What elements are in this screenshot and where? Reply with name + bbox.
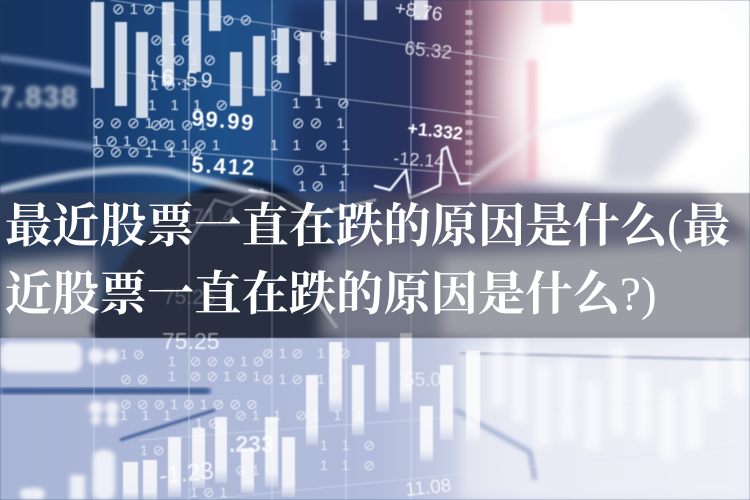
background: hand and pen silhouette	[0, 85, 750, 345]
digit rows lower: 1 1 1	[120, 407, 176, 423]
digit rows lower: ⊘⊘⊘1⊘1⊘⊘⊘	[120, 396, 263, 412]
digit columns upper: ⊘⊘⊘1 1 ⊘	[92, 144, 207, 161]
digit columns upper: ⊘⊘1⊘	[155, 52, 221, 69]
blurred white bars lower right	[491, 338, 746, 460]
market numbers upper	[146, 0, 464, 229]
digit columns upper: ⊘⊘⊘1⊘	[92, 115, 176, 132]
digit rows lower: ⊘1	[235, 462, 265, 478]
digit rows lower: 1 ⊘⊘1⊘1	[168, 368, 265, 384]
market numbers upper: -12.14	[393, 148, 445, 172]
market numbers lower: 75.25	[162, 328, 220, 354]
digit rows lower: ⊘1⊘ 1⊘	[262, 371, 347, 387]
digit columns upper: ⊘⊘ 1	[292, 115, 350, 132]
digit columns upper: 1⊘ 1	[298, 178, 351, 195]
background: light lower half	[0, 338, 750, 500]
digit columns upper: 1 1 1 ⊘	[148, 97, 233, 114]
digit columns upper: ⊘	[270, 77, 288, 94]
digit rows lower: ⊘1⊘ 1 ⊘	[262, 345, 356, 361]
digit rows lower: 1⊘	[120, 346, 150, 362]
digit columns upper: 1⊘1⊘1	[150, 137, 225, 154]
digit columns upper: 1 1 ⊘ 1	[270, 137, 355, 154]
blurred horizontal light streaks	[0, 58, 265, 195]
digit columns upper: 1 1 ⊘	[292, 95, 355, 112]
red accent bars upper right	[527, 0, 572, 180]
digit rows lower: 1 1 ⊘	[320, 437, 380, 453]
market numbers lower: .233	[229, 431, 274, 457]
market numbers upper: 65.32	[403, 38, 453, 64]
market numbers upper: 99.99	[191, 105, 255, 135]
digit columns upper: ⊘⊘	[222, 12, 257, 29]
white candlestick bars upper	[91, 0, 428, 118]
market numbers upper: 5.412	[191, 152, 255, 180]
white bars lower	[123, 333, 480, 500]
digit columns upper: ⊘ 1 1	[292, 162, 355, 179]
digit rows lower: ⊘1 1 ⊘1 1 1	[235, 407, 368, 423]
digit columns upper	[92, 1, 355, 195]
market numbers lower	[158, 286, 452, 500]
digit columns upper: 1⊘1⊘	[92, 133, 154, 150]
market numbers upper: +6.59	[146, 64, 213, 93]
digit rows lower: ⊘⊘	[120, 371, 153, 387]
background: dark blue trading screen	[0, 0, 750, 340]
blurred number 7.838 at left: 7.838	[0, 81, 78, 114]
digit columns upper: ⊘1⊘	[150, 32, 198, 49]
digit columns upper: ⊘1⊘1	[112, 1, 174, 18]
digit columns upper: ⊘ ⊘ 1	[270, 52, 337, 69]
translucent title band	[0, 193, 750, 338]
market numbers upper: +1.332	[407, 118, 464, 144]
rising line chart	[190, 85, 680, 240]
market numbers upper: 71.4	[192, 204, 236, 229]
digit columns upper: ⊘1⊘1	[150, 117, 212, 134]
digit rows lower: 1⊘1	[190, 484, 232, 500]
blurred bokeh dots lower left	[0, 342, 119, 500]
digit rows lower: 1 ⊘⊘⊘1⊘	[168, 353, 269, 369]
title: 最近股票一直在跌的原因是什么(最 近股票一直在跌的原因是什么?)	[5, 201, 730, 321]
dotted vertical columns right	[469, 10, 518, 185]
market numbers lower: 55.0	[404, 370, 441, 391]
digit rows lower: 1⊘	[140, 442, 170, 458]
digit rows lower	[120, 345, 380, 500]
digit rows lower: 1 1 ⊘	[320, 457, 380, 473]
market numbers lower: 75.25	[163, 286, 216, 309]
digit columns upper: 1 ⊘ ⊘	[270, 27, 337, 44]
market numbers lower: -1.23	[158, 457, 215, 490]
digit columns upper: 1⊘1	[150, 77, 194, 94]
digit rows lower: 1⊘	[195, 415, 225, 431]
